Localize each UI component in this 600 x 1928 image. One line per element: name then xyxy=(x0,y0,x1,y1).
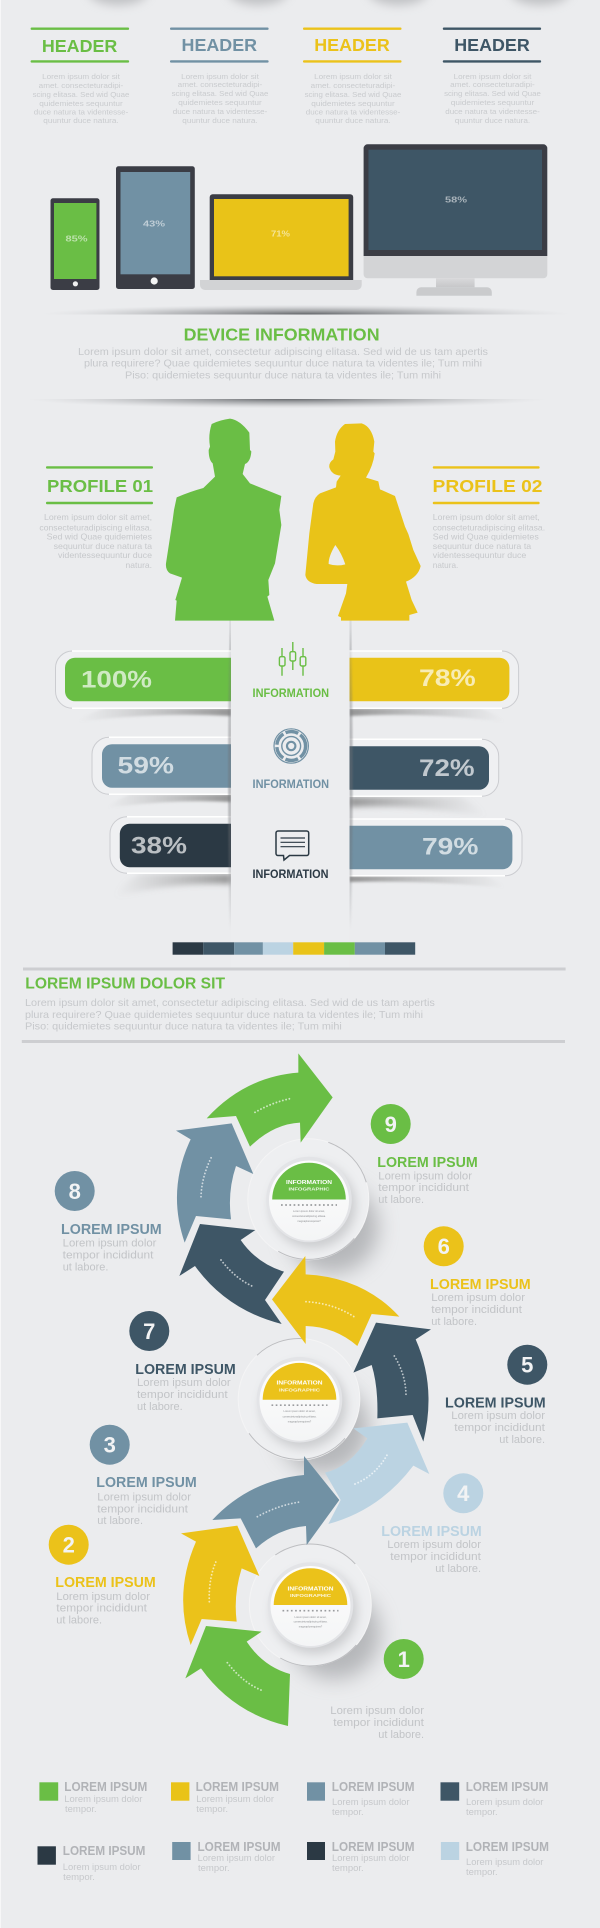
center disc: middle xyxy=(257,1357,346,1449)
body: consecteturadipiscing elitasa. xyxy=(433,522,545,532)
bar: 79% xyxy=(300,819,522,888)
legend: dark: tempor. xyxy=(63,1872,95,1882)
bar: 59% xyxy=(92,737,292,808)
heading: HEADER xyxy=(314,35,390,55)
body text: quidemietes sequuntur xyxy=(178,98,262,107)
legend: yellow: tempor. xyxy=(196,1804,228,1814)
step 4: Lorem ipsum dolor xyxy=(387,1539,481,1551)
body text: scing elitasa. Sed wid Quae xyxy=(33,90,129,99)
legend: steel: LOREM IPSUM xyxy=(332,1780,414,1794)
step 4: tempor incididunt xyxy=(390,1551,481,1563)
icon: desktop monitor 58%: 58% xyxy=(445,194,468,204)
body text: quuntur duce natura. xyxy=(455,116,530,125)
legend: dark: Lorem ipsum dolor xyxy=(63,1862,141,1872)
legend: yellow: LOREM IPSUM xyxy=(196,1780,279,1794)
device information paragraph: Lorem ipsum dolor sit amet, consectetur adipiscing elitasa. Sed wid de us tam apertis xyxy=(78,346,488,358)
step 1: Lorem ipsum dolor xyxy=(330,1705,424,1717)
bar: 100%: 100% xyxy=(81,666,152,694)
legend: steel second xyxy=(172,1840,280,1873)
legend: navy: Lorem ipsum dolor xyxy=(466,1797,543,1807)
legend: navy: tempor. xyxy=(466,1807,498,1817)
center disc: bottom: INFOGRAPHIC xyxy=(290,1593,332,1598)
step 1 xyxy=(330,1639,424,1741)
center disc: bottom: consecteturadipiscing elitasa. xyxy=(294,1620,328,1624)
step 7: ut labore. xyxy=(137,1401,183,1413)
step 2: 2 xyxy=(63,1532,75,1558)
legend: green: Lorem ipsum dolor xyxy=(64,1794,142,1804)
step 9 xyxy=(371,1104,478,1206)
step 5: LOREM IPSUM xyxy=(445,1395,546,1411)
step 4: ut labore. xyxy=(435,1563,481,1575)
body text: duce natura ta videntesse- xyxy=(306,107,401,116)
legend: dark second xyxy=(307,1840,414,1873)
body text: Lorem ipsum dolor sit xyxy=(42,72,121,81)
center disc: middle: consecteturadipiscing elitasa. xyxy=(283,1414,317,1418)
center disc: middle: INFOGRAPHIC xyxy=(279,1387,321,1392)
device information paragraph: plura requirere? Quae quidemietes sequuntur duce natura ta videntes ile; Tum mihi xyxy=(84,358,482,370)
step 8: 8 xyxy=(69,1179,81,1204)
center disc: top: INFOGRAPHIC xyxy=(288,1187,330,1192)
legend: green: tempor. xyxy=(65,1804,97,1814)
body text: amet. consecteturadipi- xyxy=(450,80,535,89)
center disc: top: Lorem ipsum dolor sit amet, xyxy=(293,1209,325,1213)
step 2: LOREM IPSUM xyxy=(55,1575,156,1591)
legend: dark: LOREM IPSUM xyxy=(63,1844,145,1858)
icon: target disc xyxy=(274,729,308,763)
body text: amet. consecteturadipi- xyxy=(178,80,263,89)
step 1: tempor incididunt xyxy=(333,1717,424,1729)
step 2: Lorem ipsum dolor xyxy=(56,1591,150,1603)
body: consecteturadipiscing elitasa. xyxy=(39,522,152,532)
step 6 xyxy=(424,1226,531,1328)
step 3: 3 xyxy=(104,1432,116,1458)
bar: 100% xyxy=(56,651,286,722)
step 7: Lorem ipsum dolor xyxy=(137,1377,231,1389)
step 1: ut labore. xyxy=(378,1729,424,1741)
heading: PROFILE 02 xyxy=(432,476,543,496)
column: green header xyxy=(31,28,129,125)
body text: quuntur duce natura. xyxy=(182,116,258,125)
body text: scing elitasa. Sed wid Quae xyxy=(305,90,401,99)
arrow: green xyxy=(185,1626,290,1726)
body: sequuntur duce natura ta xyxy=(433,541,531,551)
step 9: LOREM IPSUM xyxy=(377,1155,478,1171)
outer rings and cast shadows xyxy=(238,1139,380,1679)
silhouette: profile 02 xyxy=(305,423,421,621)
center disc: bottom xyxy=(268,1562,358,1654)
legend: green xyxy=(39,1780,147,1814)
body text: duce natura ta videntesse- xyxy=(173,107,268,116)
arrow: yellow xyxy=(181,1526,259,1645)
body: sequuntur duce natura ta xyxy=(54,541,152,551)
arrow: yellow xyxy=(272,1256,399,1346)
body: Sed wid Quae quidemietes xyxy=(433,531,539,541)
legend: dark second: LOREM IPSUM xyxy=(332,1840,414,1854)
legend: light blue: tempor. xyxy=(466,1867,498,1877)
profile 01 text xyxy=(39,466,153,570)
bar: 72%: 72% xyxy=(419,755,475,782)
body: natura. xyxy=(126,560,152,570)
step 2: ut labore. xyxy=(56,1614,102,1626)
column: steel header xyxy=(170,28,269,125)
body: videntessequuntur duce xyxy=(433,550,527,560)
arrow: navy xyxy=(179,1224,284,1324)
legend: yellow: Lorem ipsum dolor xyxy=(196,1794,274,1804)
heading: HEADER xyxy=(454,35,530,55)
paragraph: Piso: quidemietes sequuntur duce natura ta videntes ile; Tum mihi xyxy=(25,1021,342,1033)
bar: 38%: 38% xyxy=(131,832,187,860)
step 5: Lorem ipsum dolor xyxy=(451,1410,545,1422)
body text: Lorem ipsum dolor sit xyxy=(314,72,393,81)
step 5: tempor incididunt xyxy=(454,1422,545,1434)
body text: amet. consecteturadipi- xyxy=(311,81,396,90)
body text: quuntur duce natura. xyxy=(43,116,119,125)
body text: scing elitasa. Sed wid Quae xyxy=(172,89,268,98)
legend: steel second: LOREM IPSUM xyxy=(198,1840,280,1854)
heading: lorem ipsum dolor sit: LOREM IPSUM DOLOR SIT xyxy=(25,975,225,992)
body text: quidemietes sequuntur xyxy=(39,99,123,108)
step 9: ut labore. xyxy=(378,1194,424,1206)
right bars and frames xyxy=(300,651,522,888)
step 9: Lorem ipsum dolor xyxy=(378,1170,472,1182)
icon: tablet 43% xyxy=(116,166,195,289)
step 6: Lorem ipsum dolor xyxy=(431,1292,525,1304)
top edge circle shadows xyxy=(88,0,570,5)
step 3 xyxy=(90,1425,197,1527)
step 3: ut labore. xyxy=(97,1515,143,1527)
center disc: top: magnapluresquires? xyxy=(297,1219,321,1223)
step 8: ut labore. xyxy=(63,1261,108,1273)
arrow: green xyxy=(207,1053,333,1147)
legend: dark second: tempor. xyxy=(332,1863,364,1873)
body text: duce natura ta videntesse- xyxy=(34,108,129,117)
step 9: 9 xyxy=(385,1112,397,1137)
step 7: tempor incididunt xyxy=(137,1389,228,1401)
arrow: light blue xyxy=(325,1423,429,1524)
step 6: tempor incididunt xyxy=(431,1304,522,1316)
arrow: steel xyxy=(176,1123,253,1243)
icon: tablet 43%: 43% xyxy=(143,219,166,229)
silhouette: profile 01 xyxy=(166,419,281,621)
legend: light blue xyxy=(441,1840,549,1877)
icon: laptop 71% xyxy=(200,194,362,290)
body text: duce natura ta videntesse- xyxy=(445,107,540,116)
legend: yellow xyxy=(171,1780,279,1814)
paragraph: plura requirere? Quae quidemietes sequuntur duce natura ta videntes ile; Tum mihi xyxy=(25,1009,423,1021)
heading: PROFILE 01 xyxy=(47,476,153,496)
center disc: middle: Lorem ipsum dolor sit amet, xyxy=(283,1409,316,1413)
bar: 72% xyxy=(300,739,499,817)
step 3: Lorem ipsum dolor xyxy=(97,1491,191,1503)
heading: HEADER xyxy=(42,36,118,56)
legend: steel second: Lorem ipsum dolor xyxy=(198,1853,275,1863)
column: yellow header xyxy=(303,28,402,125)
body text: quidemietes sequuntur xyxy=(311,99,395,108)
label: information dark: INFORMATION xyxy=(252,869,328,881)
legend: dark second: Lorem ipsum dolor xyxy=(332,1853,410,1863)
center information panel xyxy=(230,590,351,968)
body text: Lorem ipsum dolor sit xyxy=(181,72,260,81)
body text: quidemietes sequuntur xyxy=(451,98,535,107)
arrow: navy right xyxy=(353,1323,431,1442)
body text: scing elitasa. Sed wid Quae xyxy=(444,89,541,98)
step 5: ut labore. xyxy=(499,1434,545,1446)
body: Sed wid Quae quidemietes xyxy=(47,531,152,541)
step 5: 5 xyxy=(521,1352,533,1378)
legend: steel xyxy=(307,1780,414,1817)
legend: light blue: Lorem ipsum dolor xyxy=(466,1857,543,1867)
step 4: LOREM IPSUM xyxy=(381,1524,482,1540)
legend: navy xyxy=(440,1780,548,1817)
legend: steel: Lorem ipsum dolor xyxy=(332,1797,410,1807)
bar: 59%: 59% xyxy=(118,752,174,780)
paragraph: Lorem ipsum dolor sit amet, consectetur adipiscing elitasa. Sed wid de us tam apertis xyxy=(25,997,435,1009)
body: videntessequuntur duce xyxy=(58,550,152,560)
step 6: LOREM IPSUM xyxy=(430,1277,531,1293)
arrow: steel xyxy=(212,1456,339,1548)
step 2 xyxy=(49,1525,156,1626)
step 1: 1 xyxy=(398,1647,410,1672)
left bars and frames xyxy=(56,651,292,897)
step 3: tempor incididunt xyxy=(97,1503,188,1515)
step 4 xyxy=(381,1473,483,1575)
panel front with shadows xyxy=(228,621,352,968)
column: navy header xyxy=(443,28,541,125)
step 5 xyxy=(445,1345,547,1446)
icon: desktop monitor 58% xyxy=(364,144,547,296)
profile 02 text xyxy=(432,466,545,570)
step 2: tempor incididunt xyxy=(56,1602,147,1614)
step 3: LOREM IPSUM xyxy=(96,1475,197,1491)
body text: quuntur duce natura. xyxy=(315,116,391,125)
heading: device information: DEVICE INFORMATION xyxy=(184,324,380,344)
legend: light blue: LOREM IPSUM xyxy=(466,1840,549,1854)
middle and lower spiral arrows xyxy=(181,1323,431,1726)
label: information steel: INFORMATION xyxy=(253,779,329,791)
bar: 78%: 78% xyxy=(419,665,476,692)
center disc: bottom: Lorem ipsum dolor sit amet, xyxy=(294,1615,327,1619)
bar: 78% xyxy=(300,651,519,722)
heading: HEADER xyxy=(182,35,257,55)
step 4: 4 xyxy=(457,1481,470,1506)
label: information green: INFORMATION xyxy=(253,688,329,700)
legend: steel: tempor. xyxy=(332,1807,364,1817)
icon: laptop 71%: 71% xyxy=(271,229,290,239)
icon: equalizer sliders xyxy=(279,642,306,676)
icon: phone 85%: 85% xyxy=(66,234,88,244)
legend: dark xyxy=(38,1844,145,1882)
color strip xyxy=(173,942,415,955)
step 8: LOREM IPSUM xyxy=(61,1222,162,1238)
icon: phone 85% xyxy=(50,198,100,290)
step 8 xyxy=(55,1171,162,1273)
icon: chat bubble xyxy=(276,831,309,860)
body: natura. xyxy=(433,560,458,570)
step 8: Lorem ipsum dolor xyxy=(63,1237,157,1249)
legend: navy: LOREM IPSUM xyxy=(466,1780,548,1794)
device information paragraph: Piso: quidemietes sequuntur duce natura ta videntes ile; Tum mihi xyxy=(125,370,441,382)
body: Lorem ipsum dolor sit amet, xyxy=(44,512,152,522)
step 7 xyxy=(129,1311,236,1413)
bar: 79%: 79% xyxy=(422,834,478,860)
center disc: top: consecteturadipiscing elitasa. xyxy=(292,1214,326,1218)
center disc: middle: magnapluresquires? xyxy=(288,1419,312,1423)
body: Lorem ipsum dolor sit amet, xyxy=(433,512,540,522)
legend: green: LOREM IPSUM xyxy=(64,1780,147,1794)
center disc: top: INFORMATION xyxy=(286,1180,332,1186)
body text: Lorem ipsum dolor sit xyxy=(454,72,532,81)
center disc: top xyxy=(266,1157,356,1248)
step 6: 6 xyxy=(438,1234,450,1259)
center disc: bottom: INFORMATION xyxy=(288,1587,334,1593)
upper spiral arrows xyxy=(176,1053,399,1346)
step 8: tempor incididunt xyxy=(63,1249,153,1261)
step 7: LOREM IPSUM xyxy=(135,1362,236,1378)
center disc: bottom: magnapluresquires? xyxy=(299,1625,323,1629)
body text: amet. consecteturadipi- xyxy=(39,81,124,90)
legend: steel second: tempor. xyxy=(198,1863,230,1873)
step 9: tempor incididunt xyxy=(378,1182,469,1194)
bar: 38% xyxy=(110,817,290,897)
center disc: middle: INFORMATION xyxy=(276,1381,323,1387)
step 7: 7 xyxy=(143,1319,155,1344)
step 6: ut labore. xyxy=(431,1316,477,1328)
